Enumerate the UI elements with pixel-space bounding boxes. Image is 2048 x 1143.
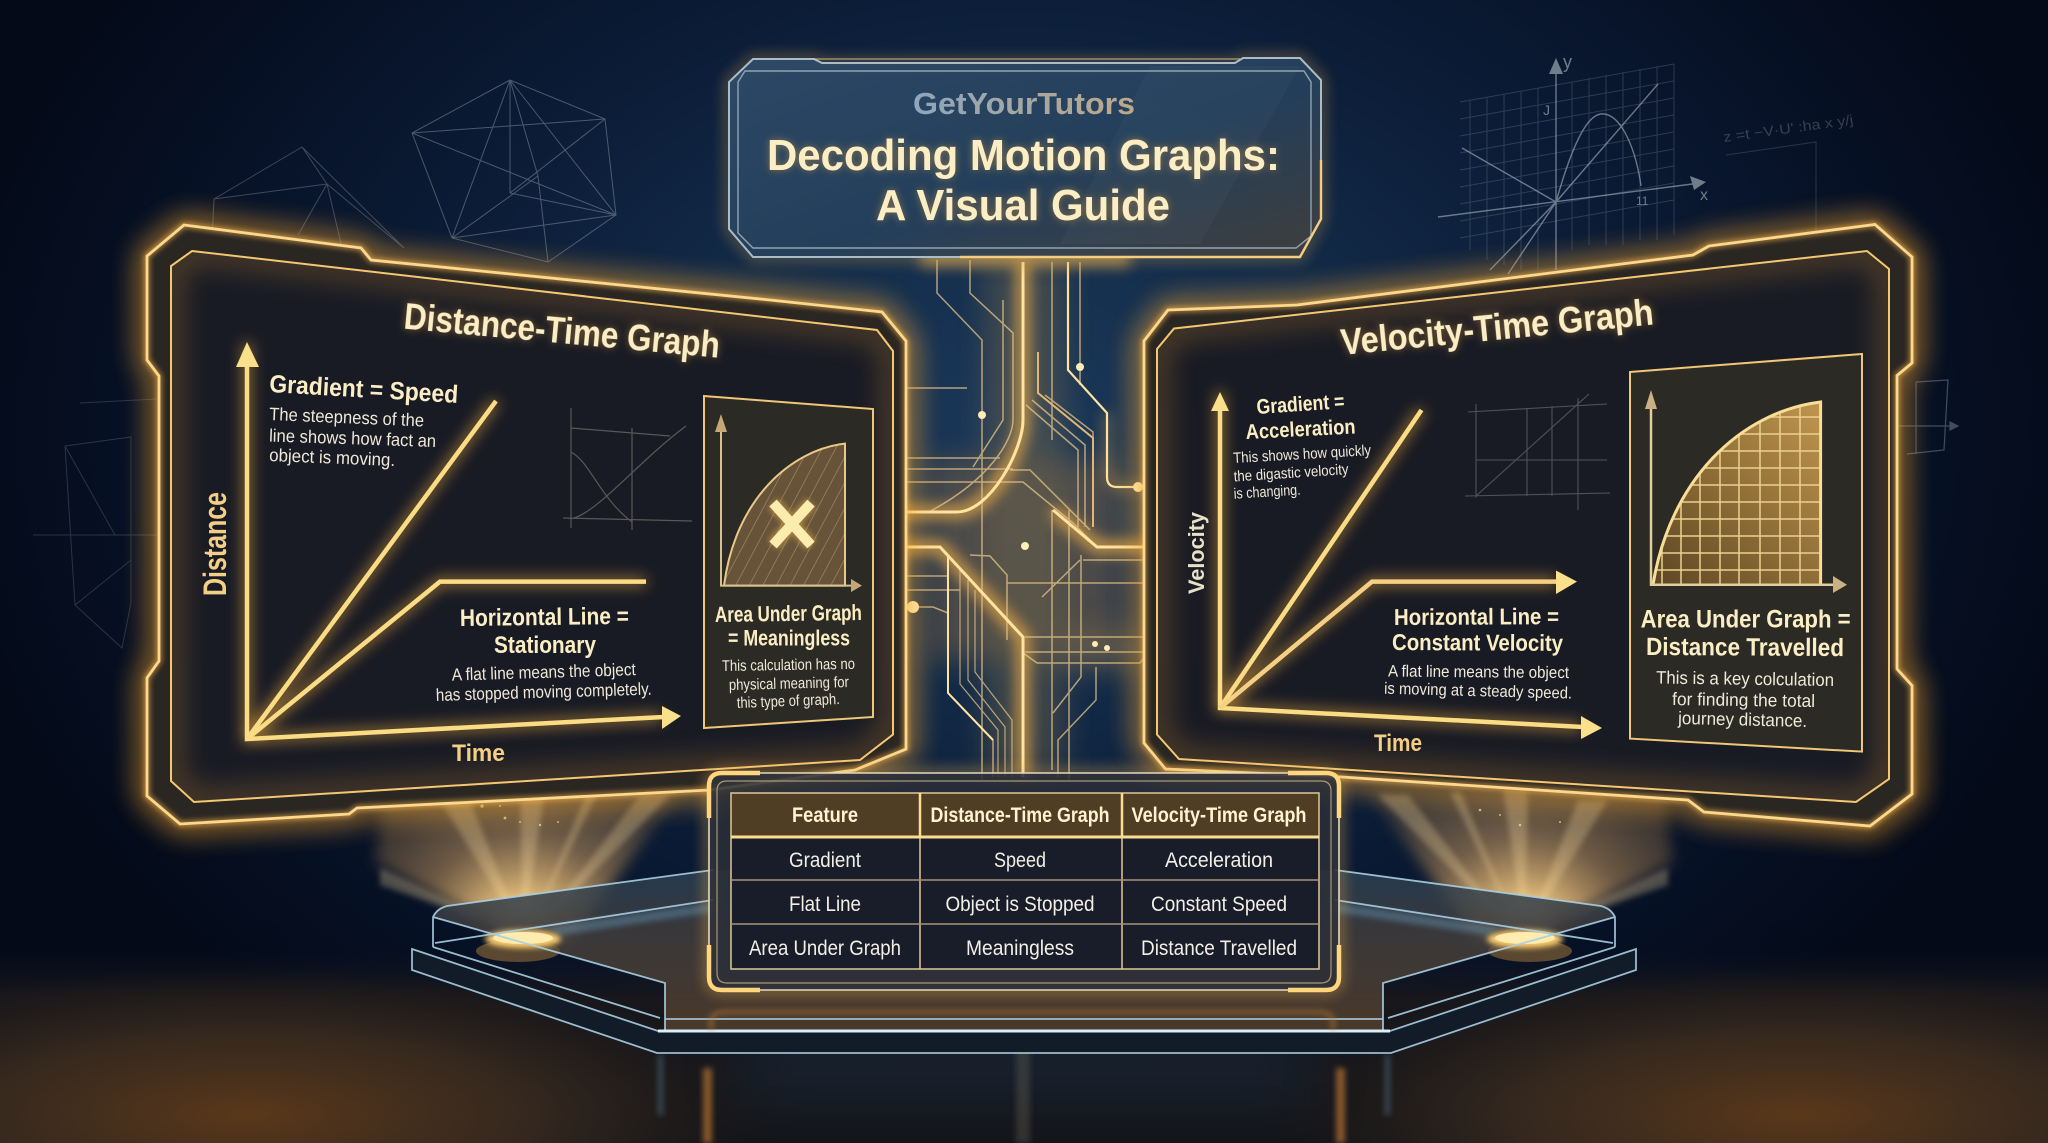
table row: gradient: Gradient bbox=[789, 849, 861, 872]
callout: horizontal line equals stationary: has stopped moving completely. bbox=[436, 679, 652, 705]
main title bbox=[767, 131, 1280, 230]
table row: gradient bbox=[789, 849, 1273, 872]
glass platform base bbox=[412, 870, 1636, 1053]
table header row: Feature bbox=[792, 804, 858, 827]
table header row bbox=[792, 804, 1306, 827]
math graph sketch, top right: J bbox=[1543, 102, 1550, 118]
table row: area under graph: Distance Travelled bbox=[1141, 937, 1297, 960]
callout: gradient equals speed: The steepness of the bbox=[269, 404, 425, 430]
callout: gradient equals speed bbox=[269, 370, 459, 470]
card: area under graph distance travelled: journey distance. bbox=[1677, 708, 1807, 731]
callout: horizontal line equals stationary: Stationary bbox=[494, 632, 597, 659]
callout: gradient equals speed: Gradient = Speed bbox=[269, 370, 459, 409]
math graph sketch, top right: y bbox=[1563, 52, 1572, 72]
callout: gradient equals acceleration bbox=[1233, 390, 1372, 503]
card: area under graph meaningless: Area Under Graph bbox=[715, 600, 862, 627]
main title: A Visual Guide bbox=[876, 181, 1170, 230]
card: area under graph distance travelled: Area Under Graph = bbox=[1641, 606, 1851, 634]
main title: Decoding Motion Graphs: bbox=[767, 131, 1280, 180]
card: area under graph meaningless bbox=[704, 396, 873, 728]
faint background chart bbox=[563, 408, 692, 530]
table row: gradient: Acceleration bbox=[1165, 849, 1273, 872]
comparison table bbox=[731, 793, 1319, 969]
table row: flat line: Object is Stopped bbox=[946, 893, 1094, 916]
table row: gradient: Speed bbox=[994, 849, 1046, 872]
callout: gradient equals acceleration: the digastic velocity bbox=[1233, 461, 1349, 485]
left light emitter bbox=[476, 930, 561, 962]
callout: horizontal line equals stationary: Horizontal Line = bbox=[460, 603, 629, 632]
brand name: GetYourTutors bbox=[913, 86, 1135, 121]
table row: flat line bbox=[789, 893, 1287, 916]
comparison table frame bbox=[709, 773, 1339, 990]
callout: gradient equals speed: object is moving. bbox=[269, 445, 396, 470]
mini chart with crossed-out hatched area bbox=[715, 414, 862, 592]
card: area under graph distance travelled: Distance Travelled bbox=[1646, 633, 1844, 662]
wire sketch, right edge bbox=[1898, 380, 1958, 454]
axis label: time: Time bbox=[452, 740, 505, 767]
card: area under graph meaningless: physical meaning for bbox=[729, 674, 849, 694]
table row: area under graph: Meaningless bbox=[966, 937, 1074, 960]
card: area under graph meaningless: This calculation has no bbox=[722, 656, 855, 675]
table row: area under graph bbox=[749, 937, 1297, 960]
table header row: Velocity-Time Graph bbox=[1132, 804, 1306, 827]
math graph sketch, top right: z =t −V·U' :ha x y/j bbox=[1722, 111, 1854, 145]
light beams bbox=[375, 790, 1673, 949]
callout: gradient equals acceleration: Acceleration bbox=[1245, 415, 1356, 444]
card: area under graph meaningless: this type of graph. bbox=[737, 691, 840, 712]
math graph sketch, top right bbox=[1438, 52, 1854, 318]
sparkles bbox=[480, 804, 1561, 826]
callout: horizontal line equals constant velocity: Constant Velocity bbox=[1392, 629, 1563, 656]
card: area under graph distance travelled: for finding the total bbox=[1672, 689, 1815, 711]
callout: horizontal line equals constant velocity: A flat line means the object bbox=[1388, 663, 1569, 682]
math graph sketch, top right: x bbox=[1700, 187, 1708, 204]
axis label: velocity: Velocity bbox=[1184, 511, 1209, 594]
table row: flat line: Flat Line bbox=[789, 893, 861, 916]
wireframe polyhedra, left bbox=[33, 80, 616, 648]
callout: gradient equals acceleration: This shows how quickly bbox=[1233, 442, 1372, 467]
heading: velocity-time graph: Velocity-Time Graph bbox=[1339, 292, 1655, 363]
callout: gradient equals acceleration: is changing. bbox=[1233, 482, 1301, 503]
callout: gradient equals speed: line shows how fact an bbox=[269, 426, 436, 451]
right light emitter bbox=[1487, 930, 1572, 962]
callout: gradient equals acceleration: Gradient = bbox=[1256, 390, 1345, 419]
line chart: velocity against time bbox=[1211, 392, 1602, 739]
table row: area under graph: Area Under Graph bbox=[749, 937, 901, 960]
math graph sketch, top right: 11 bbox=[1636, 194, 1649, 208]
card: area under graph meaningless: = Meaningless bbox=[728, 626, 850, 650]
table header row: Distance-Time Graph bbox=[930, 804, 1110, 827]
panel: velocity-time graph bbox=[1144, 224, 1912, 826]
callout: horizontal line equals stationary bbox=[436, 603, 652, 705]
axis label: distance: Distance bbox=[197, 492, 233, 596]
axis label: time: Time bbox=[1374, 730, 1422, 757]
circuit connectors bbox=[890, 260, 1160, 780]
callout: horizontal line equals constant velocity: Horizontal Line = bbox=[1394, 603, 1559, 630]
title plate bbox=[729, 58, 1321, 267]
callout: horizontal line equals constant velocity bbox=[1384, 603, 1572, 703]
callout: horizontal line equals constant velocity: is moving at a steady speed. bbox=[1384, 680, 1572, 703]
table row: flat line: Constant Speed bbox=[1151, 893, 1287, 916]
heading: distance-time graph: Distance-Time Graph bbox=[402, 296, 722, 366]
faint background chart bbox=[1465, 394, 1610, 510]
panel: distance-time graph bbox=[147, 225, 906, 824]
callout: horizontal line equals stationary: A flat line means the object bbox=[452, 659, 636, 685]
line chart: distance against time bbox=[236, 342, 681, 739]
mini chart with shaded grid area bbox=[1645, 390, 1847, 593]
card: area under graph distance travelled bbox=[1630, 354, 1862, 752]
card: area under graph distance travelled: This is a key colculation bbox=[1656, 668, 1834, 690]
